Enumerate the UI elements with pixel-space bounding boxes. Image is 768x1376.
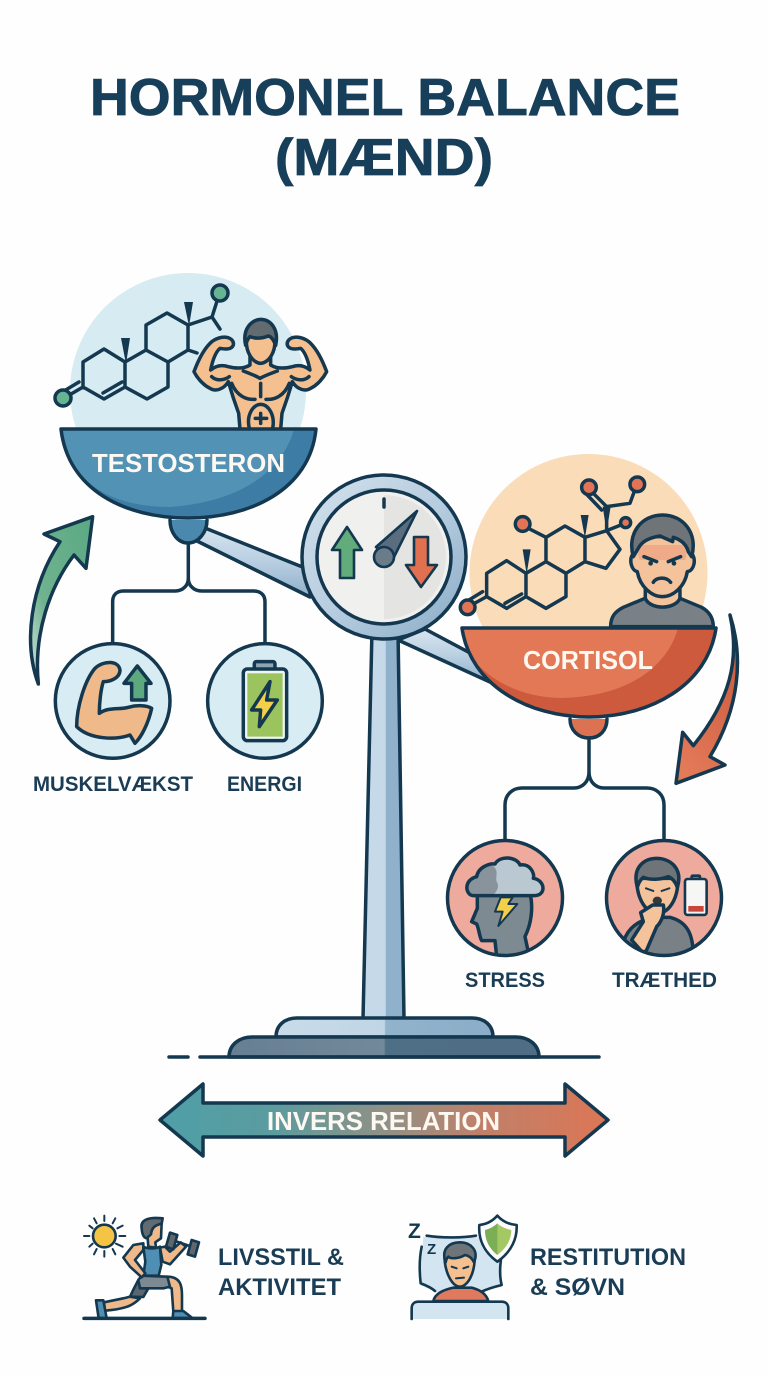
cortisol backdrop circle (470, 454, 708, 692)
muscular man (194, 319, 327, 429)
icon: lifestyle runner (84, 1216, 205, 1318)
green curved arrow (31, 517, 93, 684)
gauge down arrow (406, 537, 437, 587)
title (90, 69, 680, 187)
panel: testosterone (55, 273, 327, 518)
icon: stress (448, 840, 562, 957)
icon: recovery and sleep (408, 1216, 517, 1319)
cortisol bowl: CORTISOL (523, 645, 653, 675)
testosterone backdrop circle (70, 273, 306, 509)
icon: tiredness (606, 840, 722, 957)
inverse relation arrow (160, 1084, 608, 1156)
icon: energy battery (208, 644, 322, 758)
cortisol bowl (455, 628, 716, 717)
cortisol molecule (460, 477, 645, 615)
right connector (505, 719, 664, 840)
scale base (169, 1018, 599, 1057)
label: restitution og søvn: & SØVN (530, 1274, 625, 1301)
label: stress: STRESS (465, 969, 545, 992)
scale beam (195, 524, 490, 682)
label: træthed: TRÆTHED (612, 969, 717, 992)
label: livsstil og aktivitet: LIVSSTIL & (218, 1244, 344, 1271)
left connector (113, 520, 265, 643)
gauge (302, 475, 466, 639)
label: restitution og søvn: RESTITUTION (530, 1244, 686, 1271)
inverse relation arrow: INVERS RELATION (267, 1106, 500, 1136)
gauge up arrow (332, 527, 362, 578)
testosterone bowl: TESTOSTERON (92, 448, 285, 478)
gauge needle (374, 511, 417, 567)
title: (MÆND) (275, 129, 493, 187)
label: energi: ENERGI (227, 773, 302, 796)
angry man (611, 515, 713, 627)
scale post (363, 630, 404, 1019)
icon: recovery and sleep: Z (408, 1220, 421, 1243)
testosterone bowl (55, 429, 316, 518)
label: livsstil og aktivitet: AKTIVITET (218, 1274, 341, 1301)
sun (84, 1216, 125, 1257)
red curved arrow (676, 615, 737, 783)
icon: recovery and sleep: Z (427, 1241, 436, 1258)
panel: cortisol (455, 454, 716, 717)
icon: muscle growth (55, 644, 170, 758)
label: muskelvækst: MUSKELVÆKST (33, 773, 193, 796)
title: HORMONEL BALANCE (90, 69, 680, 127)
label: livsstil og aktivitet (218, 1244, 344, 1301)
testosterone molecule (55, 285, 228, 406)
label: restitution og søvn (530, 1244, 686, 1301)
